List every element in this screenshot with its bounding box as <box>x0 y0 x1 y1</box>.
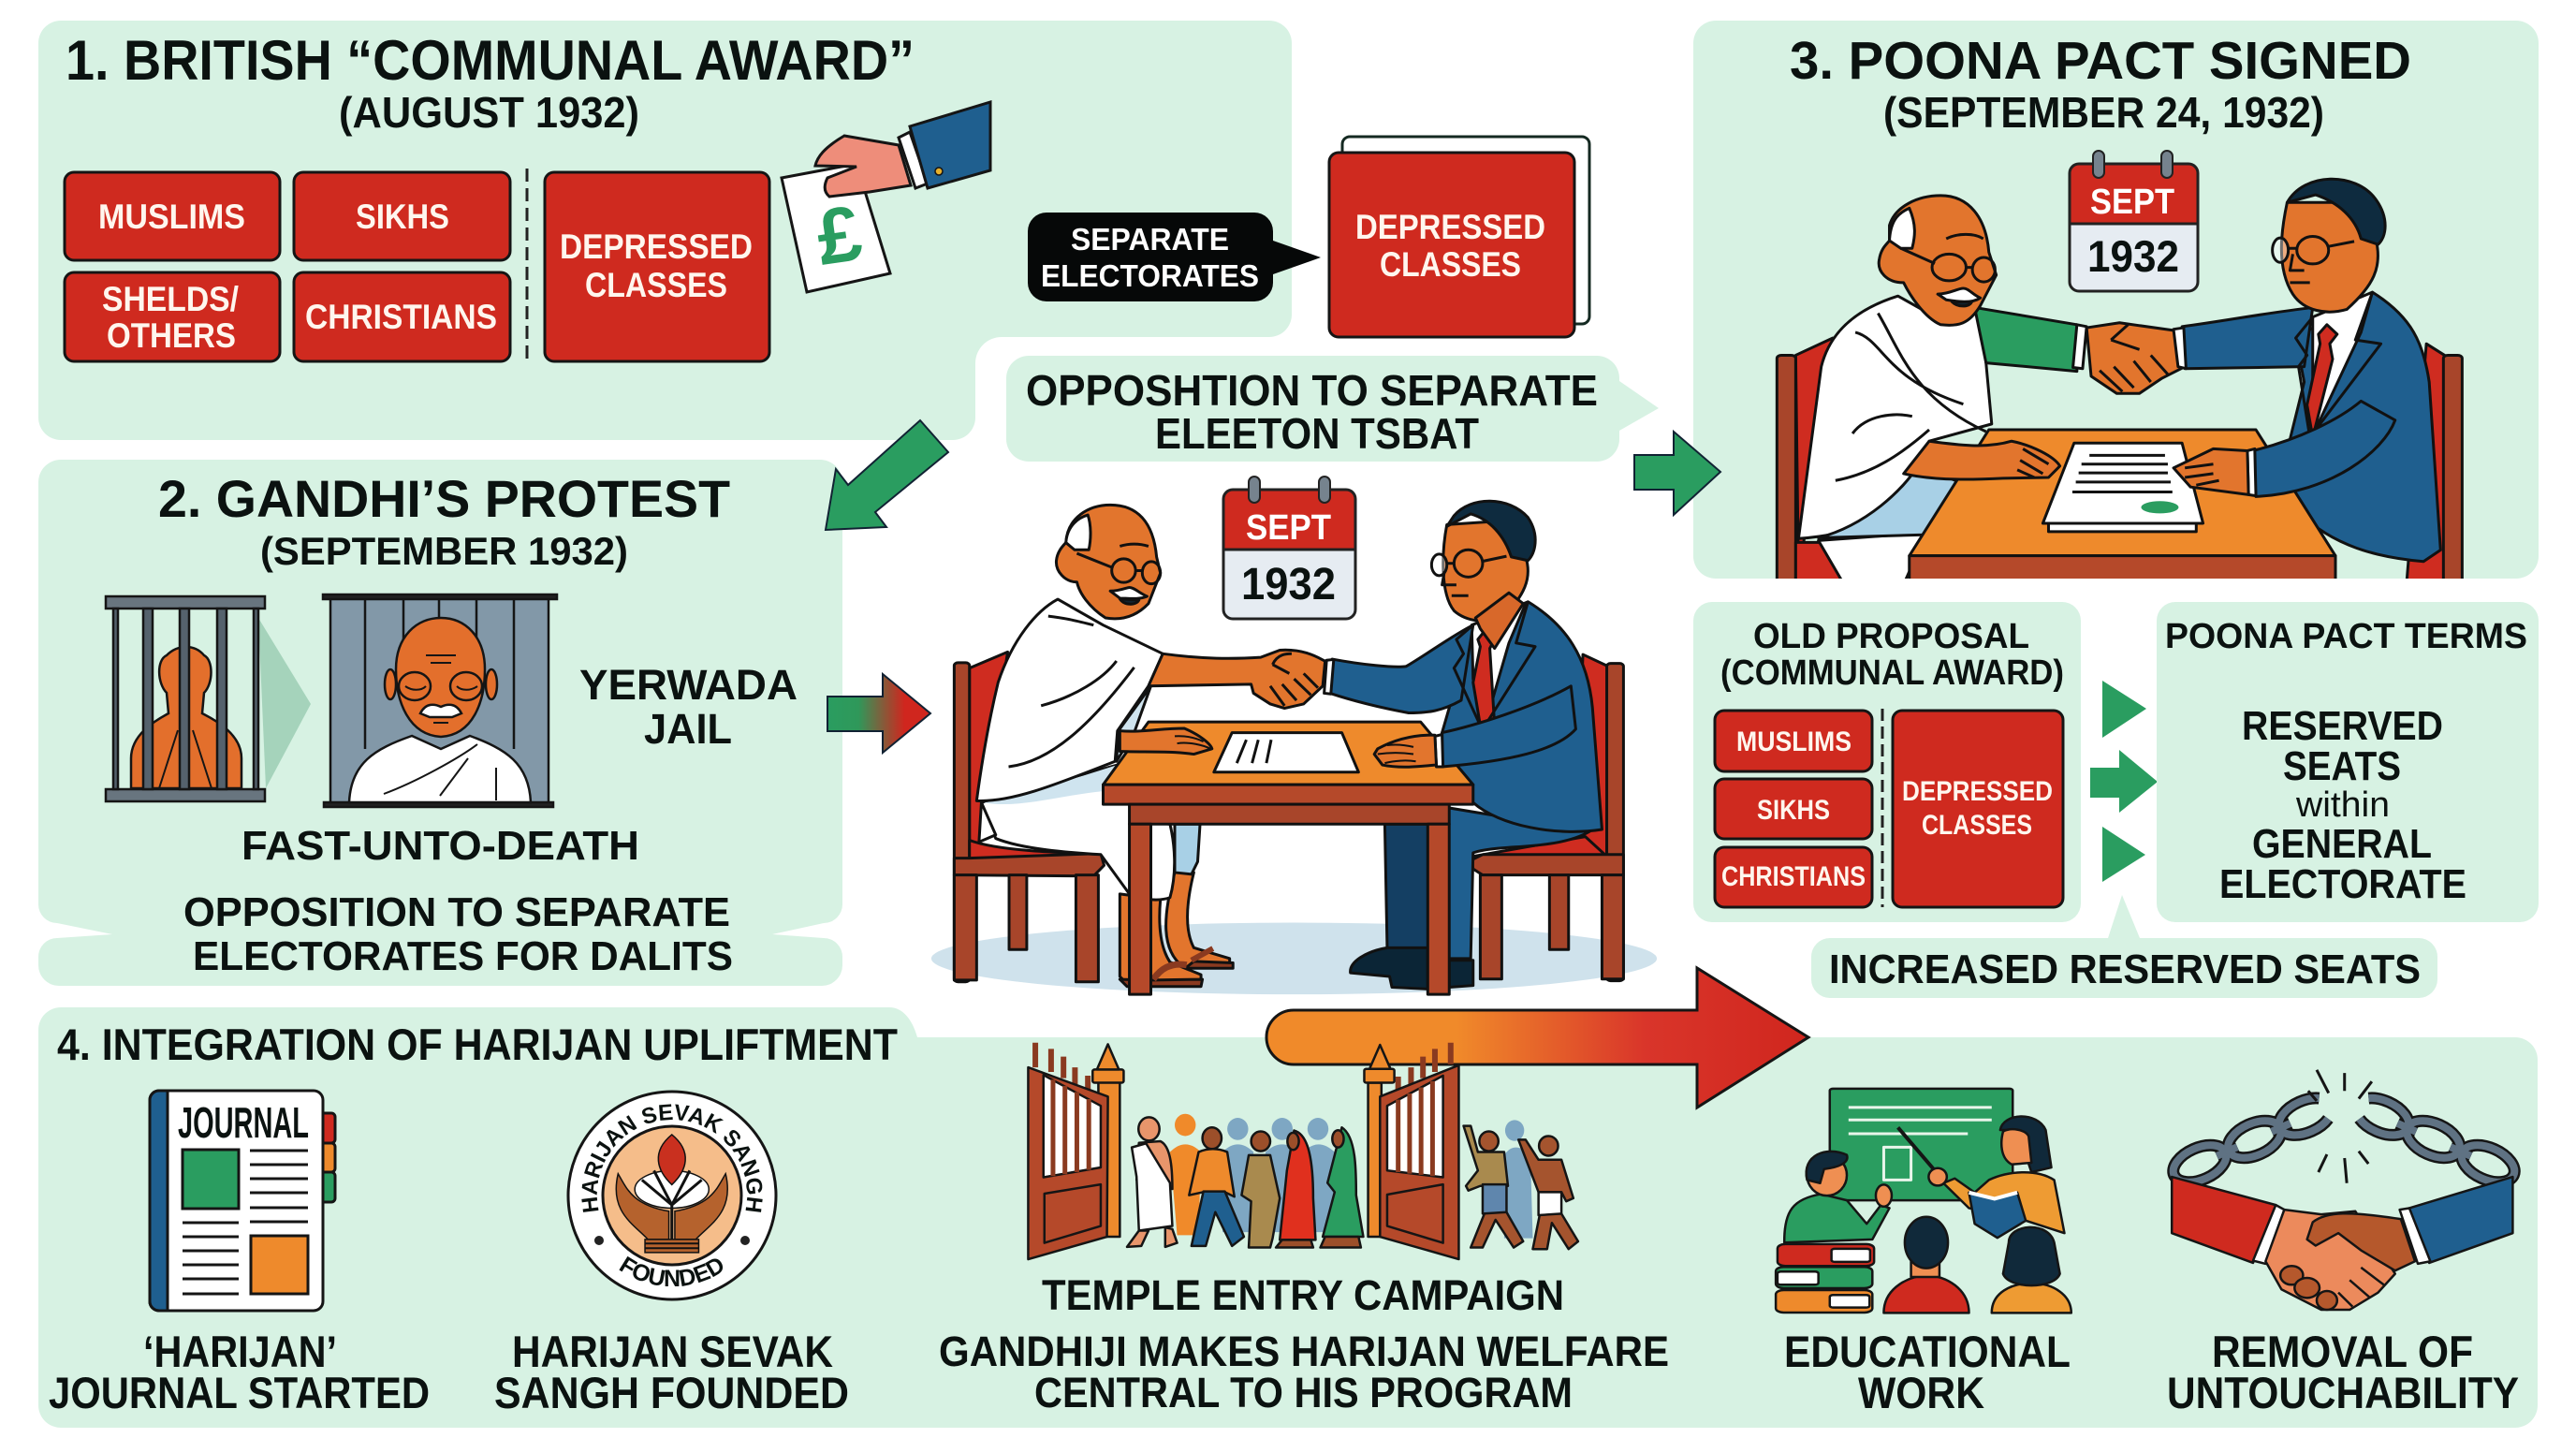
forearms and hands on table <box>1120 686 1575 767</box>
box: Christians: CHRISTIANS <box>1721 861 1866 892</box>
heading 2: 2. GANDHI’S PROTEST <box>158 469 730 528</box>
label: Gandhiji makes Harijan welfare central: GANDHIJI MAKES HARIJAN WELFARE <box>939 1328 1669 1375</box>
crowd figures <box>1127 1117 1578 1249</box>
heading 3: 3. POONA PACT SIGNED <box>1790 31 2411 91</box>
panel: Poona Pact terms: GENERAL <box>2252 821 2432 867</box>
arrow: award to protest <box>826 420 948 530</box>
chalkboard <box>1830 1089 2012 1200</box>
panel: Poona Pact terms: POONA PACT TERMS <box>2165 617 2527 656</box>
callout: increased reserved seats <box>1811 895 2437 998</box>
callout: separate electorates: ELECTORATES <box>1041 258 1259 293</box>
calendar: Sept 1932 <box>1223 477 1355 619</box>
label: Yerwada Jail: JAIL <box>644 705 732 753</box>
callout: separate electorates: SEPARATE <box>1071 222 1229 257</box>
left chair <box>954 652 1105 982</box>
box: Shields / Others: SHELDS/ <box>102 280 239 318</box>
label: Harijan Sevak Sangh founded: SANGH FOUNDED <box>494 1368 849 1417</box>
label: Harijan journal started: JOURNAL STARTED <box>49 1368 430 1417</box>
panel: Poona Pact terms <box>2157 602 2539 922</box>
teacher <box>1898 1117 2064 1238</box>
panel 1: British Communal Award <box>38 21 1321 440</box>
label: opposition to separate electorates for dalits <box>183 889 733 979</box>
label: Harijan journal started: ‘HARIJAN’ <box>143 1327 337 1376</box>
box: Sikhs: SIKHS <box>356 198 449 236</box>
panel 2: Gandhi's protest <box>38 460 842 986</box>
forearms and hands on table <box>1904 401 2395 496</box>
right chair <box>1471 654 1623 981</box>
panel: Poona Pact terms: within <box>2295 785 2390 825</box>
student with stack of books <box>1776 1152 1892 1313</box>
callout: opposition to separate electorates <box>1006 356 1659 462</box>
label: Harijan Sevak Sangh founded <box>494 1327 849 1417</box>
panel 4: Integration of Harijan uplift <box>49 1020 2521 1417</box>
arrow: protest to negotiation <box>827 674 930 753</box>
box: Depressed Classes: DEPRESSED <box>560 227 753 266</box>
label: Harijan Sevak Sangh founded: HARIJAN SEVAK <box>512 1327 833 1376</box>
icon: Gandhi in Yerwada cell <box>323 594 557 807</box>
arrows: old proposal to terms <box>2090 681 2158 882</box>
icon: Harijan journal <box>150 1091 335 1311</box>
box: Muslims <box>65 172 280 260</box>
box: Christians <box>294 272 510 361</box>
label: educational work: EDUCATIONAL <box>1784 1327 2071 1376</box>
calendar: Sept 1932 <box>2070 151 2198 291</box>
panel 3: Poona Pact signed <box>1693 21 2539 584</box>
panel 1 background <box>38 21 1292 440</box>
callout: increased reserved seats: INCREASED RESERVED SEATS <box>1829 946 2421 992</box>
label: removal of untouchability: REMOVAL OF <box>2212 1327 2473 1376</box>
callout: separate electorates <box>1028 213 1321 301</box>
old proposal background <box>1693 602 2081 922</box>
chairs <box>1777 338 2462 584</box>
box: Depressed Classes <box>1893 711 2063 907</box>
panel 3 background <box>1693 21 2539 579</box>
heading 1: 1. BRITISH “COMMUNAL AWARD” <box>66 29 915 92</box>
box: Sikhs: SIKHS <box>1757 795 1830 826</box>
handshake and sparks <box>2172 1070 2512 1310</box>
label: temple entry campaign: TEMPLE ENTRY CAMPAIGN <box>1042 1271 1564 1319</box>
box: Christians: CHRISTIANS <box>305 298 497 336</box>
illustration: broken chains and handshake <box>2168 1070 2520 1310</box>
icon: Harijan Sevak Sangh seal: HARIJAN SEVAK SANGH <box>581 1104 763 1212</box>
box: depressed classes, stacked sheets: CLASSES <box>1380 245 1521 284</box>
icon: hand giving pound note: £ <box>812 188 867 282</box>
icon: silhouette behind bars <box>106 596 311 801</box>
old proposal heading: OLD PROPOSAL <box>1753 617 2029 656</box>
icon: hand giving pound note <box>782 102 990 292</box>
heading 4: 4. INTEGRATION OF HARIJAN UPLIFTMENT <box>57 1020 898 1069</box>
panel: Poona Pact terms: SEATS <box>2283 743 2401 789</box>
box: Muslims: MUSLIMS <box>1736 726 1852 757</box>
calendar: Sept 1932: SEPT <box>1246 508 1331 548</box>
figure: Ambedkar <box>1325 501 1602 989</box>
box: Depressed Classes <box>545 172 769 361</box>
panel: Poona Pact terms: ELECTORATE <box>2219 861 2466 907</box>
label: educational work <box>1784 1327 2071 1417</box>
crowd background silhouettes <box>1170 1114 1533 1239</box>
table <box>1103 722 1473 994</box>
calendar: Sept 1932: 1932 <box>1241 560 1336 609</box>
panel: Poona Pact terms: RESERVED <box>2242 703 2443 749</box>
illustration: signing the pact <box>1777 179 2462 584</box>
arrow: to Poona Pact panel <box>1634 432 1720 515</box>
sub heading date: (AUGUST 1932) <box>339 88 639 137</box>
box: Muslims <box>1715 711 1872 771</box>
sub heading date: (SEPTEMBER 24, 1932) <box>1883 88 2324 137</box>
box: Depressed Classes: CLASSES <box>585 266 727 304</box>
box: Shields / Others <box>65 272 280 361</box>
illustration: educational work <box>1776 1089 2071 1313</box>
box: Christians <box>1715 847 1872 907</box>
label: opposition to separate electorates for dalits: OPPOSITION TO SEPARATE <box>183 889 730 935</box>
figure: Gandhi <box>1798 196 2185 584</box>
icon: Harijan Sevak Sangh seal <box>567 1090 777 1301</box>
panel 4 background <box>38 1007 2538 1428</box>
calendar: Sept 1932: SEPT <box>2090 183 2174 222</box>
box: Sikhs <box>294 172 510 260</box>
box: Sikhs <box>1715 779 1872 839</box>
label: educational work: WORK <box>1858 1368 1984 1417</box>
icon: Harijan Sevak Sangh seal: FOUNDED <box>620 1256 723 1286</box>
panel 2 background <box>38 460 842 986</box>
box: Shields / Others: OTHERS <box>107 316 236 355</box>
label: Harijan journal started <box>49 1327 430 1417</box>
sub heading date: (SEPTEMBER 1932) <box>260 529 628 573</box>
figure: Ambedkar <box>2174 179 2440 562</box>
label: Yerwada Jail: YERWADA <box>579 661 798 709</box>
left gate <box>1028 1043 1123 1259</box>
label: opposition to separate electorates for dalits: ELECTORATES FOR DALITS <box>193 933 733 979</box>
label: Yerwada Jail <box>579 661 798 753</box>
illustration: temple entry gates and crowd <box>1028 1043 1578 1259</box>
label: removal of untouchability: UNTOUCHABILITY <box>2167 1368 2519 1417</box>
box: depressed classes, stacked sheets <box>1329 137 1589 337</box>
calendar: Sept 1932: 1932 <box>2087 231 2179 281</box>
ground shadow <box>931 923 1657 994</box>
icon: Harijan journal: JOURNAL <box>178 1098 309 1147</box>
callout: opposition to separate electorates: OPPOSHTION TO SEPARATE <box>1026 366 1598 415</box>
box: Muslims: MUSLIMS <box>98 198 245 236</box>
table with document <box>1910 430 2335 584</box>
left broken chain <box>2168 1093 2330 1190</box>
right broken chain <box>2358 1093 2520 1190</box>
figure: Gandhi <box>976 505 1325 987</box>
callout: opposition to separate electorates: ELEETON TSBAT <box>1155 409 1479 458</box>
box: Depressed Classes: DEPRESSED <box>1902 776 2053 807</box>
label: removal of untouchability <box>2167 1327 2519 1417</box>
box: Depressed Classes: CLASSES <box>1922 810 2032 841</box>
panel: old proposal <box>1693 602 2081 922</box>
old proposal heading <box>1720 617 2064 693</box>
label: fast unto death: FAST-UNTO-DEATH <box>242 823 639 869</box>
label: Gandhiji makes Harijan welfare central: CENTRAL TO HIS PROGRAM <box>1034 1369 1573 1416</box>
label: Gandhiji makes Harijan welfare central <box>939 1328 1669 1416</box>
illustration: Gandhi and Ambedkar at table <box>931 501 1657 994</box>
box: depressed classes, stacked sheets: DEPRESSED <box>1355 208 1545 246</box>
right gate <box>1364 1043 1458 1259</box>
arrow: big orange to red <box>1266 968 1808 1108</box>
old proposal heading: (COMMUNAL AWARD) <box>1720 653 2064 693</box>
seated students <box>1883 1217 2071 1313</box>
